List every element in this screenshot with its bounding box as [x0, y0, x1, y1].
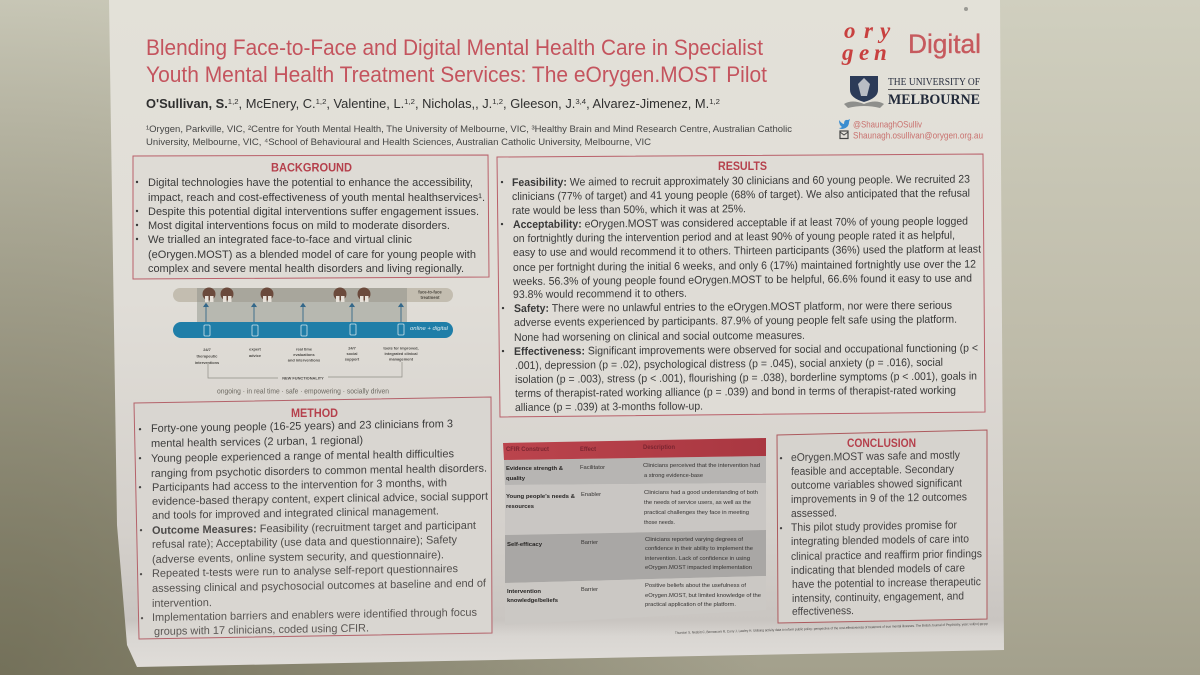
- panel: conclusion: [777, 430, 987, 623]
- authors: , Nicholas,, J.: [415, 97, 492, 111]
- contact details: [839, 119, 983, 142]
- logo: orygen digital: ory: [844, 18, 891, 43]
- method bullets: (adverse events, online system security, and questionnaire).: [152, 549, 444, 566]
- authors: 1,2: [492, 97, 503, 106]
- feature labels: 24/7: [348, 346, 356, 350]
- background bullets: impact, reach and cost-effectiveness of youth mental healthservices¹.: [148, 192, 485, 204]
- feature labels: support: [345, 356, 360, 362]
- feature labels: interventions: [195, 360, 219, 365]
- feature labels: social: [346, 351, 358, 356]
- icon: email: [840, 131, 848, 138]
- conclusion bullets: integrating blended models of care into: [791, 533, 969, 548]
- method bullets: mental health services (2 urban, 1 regional): [151, 435, 363, 450]
- row: evidence strength: Evidence strength &: [506, 466, 563, 472]
- feature labels: tools for improved,: [383, 346, 419, 350]
- row: young people's needs: the needs of service users, as well as the: [644, 500, 751, 506]
- method bullets: ranging from psychotic disorders to common mental health disorders.: [151, 463, 487, 480]
- panel: method: [134, 397, 492, 639]
- authors: 1,2: [316, 97, 326, 106]
- results bullets: Feasibility: We aimed to recruit approximately 30 clinicians and 60 young people. We recruited 23: [512, 174, 970, 189]
- row: evidence strength: Facilitator: [580, 465, 605, 471]
- results bullets: terms of therapist-rated working alliance (p = .039) and bond in terms of therapist-rated working: [515, 385, 956, 400]
- conclusion bullets: outcome variables showed significant: [791, 477, 962, 492]
- poster title: Youth Mental Health Treatment Services: The eOrygen.MOST Pilot: [146, 62, 767, 87]
- background bullets: (eOrygen.MOST) as a blended model of care for young people with: [148, 249, 476, 261]
- icon: twitter: [839, 119, 850, 129]
- method bullets: Young people experienced a range of mental health difficulties: [151, 448, 454, 465]
- results bullets: Effectiveness: Significant improvements were observed for social and occupational functioning (p <: [514, 343, 978, 358]
- conclusion bullets: assessed.: [791, 507, 837, 520]
- background bullets: We trialled an integrated face-to-face and virtual clinic: [148, 234, 412, 246]
- method bullets: evidence-based therapy content, expert clinical advice, social support: [152, 491, 488, 508]
- row: young people's needs: resources: [506, 504, 534, 510]
- row: young people's needs: practical challenges they face in meeting: [644, 510, 749, 516]
- row: evidence strength: [506, 463, 760, 482]
- results bullets: adverse events experienced by participants. 87.9% of young people felt safe using the platform.: [514, 314, 957, 329]
- label: face-to-face treatment: [418, 290, 442, 300]
- background bullets: Digital technologies have the potential to enhance the accessibility,: [148, 177, 473, 189]
- icon: phones: [204, 324, 404, 336]
- results bullets: on fortnightly during the intervention period and at least 90% of young people rated it as helpful,: [513, 230, 955, 245]
- results bullets: easy to use and would recommend it to others. Thirteen participants (36%) used the platform at least: [513, 243, 981, 259]
- results bullets: 93.8% would recommend it to others.: [513, 288, 687, 301]
- feature labels: advice: [249, 353, 262, 358]
- authors: 1,2: [709, 97, 720, 106]
- method bullets: Participants had access to the intervention for 3 months, with: [152, 477, 447, 494]
- conclusion bullets: indicating that blended models of care: [791, 562, 965, 577]
- conclusion bullets: clinical practice and reaffirm prior findings: [791, 548, 982, 563]
- arrows from digital to face-to-face: [204, 304, 404, 322]
- row: intervention knowledge: Barrier: [581, 587, 598, 593]
- background bullets: Most digital interventions focus on mild to moderate disorders.: [148, 220, 450, 232]
- conclusion bullets: intensity, continuity, engagement, and: [792, 590, 964, 605]
- poster pin mark: [964, 7, 968, 11]
- panel: results: [497, 154, 985, 417]
- authors: , McEnery, C.: [239, 97, 316, 111]
- online and digital bar: [173, 322, 453, 338]
- row: evidence strength: quality: [506, 476, 526, 482]
- feature labels: therapeutic: [197, 354, 218, 358]
- results bullets: None had worsening on clinical and social outcome measures.: [514, 330, 805, 344]
- poster title: [146, 35, 767, 87]
- method bullets: intervention.: [152, 597, 212, 610]
- feature labels: integrated clinical: [384, 351, 418, 356]
- conclusion bullets: eOrygen.MOST was safe and mostly: [791, 449, 960, 464]
- row: self-efficacy: [507, 537, 753, 571]
- label: online + digital: online + digital: [410, 326, 449, 332]
- results bullets: Acceptability: eOrygen.MOST was considered acceptable if at least 70% of young people logged: [513, 216, 968, 231]
- table header: Description: [643, 445, 675, 451]
- face-to-face bar: [173, 288, 453, 323]
- method bullets: Repeated t-tests were run to analyse self-report questionnaires: [152, 563, 458, 580]
- logo: university of melbourne: MELBOURNE: [888, 92, 980, 108]
- feature labels: [195, 346, 419, 365]
- heading: results: RESULTS: [718, 159, 767, 173]
- results bullets: Safety: There were no unlawful entries to the eOrygen.MOST platform, nor were there serious: [514, 300, 952, 315]
- table header: CFIR Construct: [506, 447, 549, 453]
- results bullets: [501, 173, 981, 414]
- conclusion bullets: have the potential to increase therapeutic: [792, 576, 981, 591]
- method bullets: and tools for improved and integrated clinical management.: [152, 505, 439, 522]
- results bullets: .001), depression (p = .02), psychological distress (p = .045), social anxiety (p = .016), social: [515, 357, 943, 372]
- results bullets: weeks. 56.3% of young people found eOrygen.MOST to be helpful, 66.6% found it easy to use and: [512, 273, 972, 288]
- feature labels: and interventions: [288, 358, 320, 362]
- heading: background: BACKGROUND: [271, 160, 352, 174]
- authors: 3,4: [575, 97, 586, 106]
- row: evidence strength: Clinicians perceived that the intervention had: [643, 463, 760, 469]
- results bullets: rate would be less than 50%, which it was at 25%.: [512, 203, 746, 217]
- row: intervention knowledge: eOrygen.MOST, but limited knowledge of the: [645, 593, 761, 599]
- table row shading: [504, 456, 766, 625]
- row: self-efficacy: Barrier: [581, 540, 598, 546]
- method bullets: Implementation barriers and enablers were identified through focus: [152, 607, 477, 624]
- row: intervention knowledge: knowledge/beliefs: [507, 598, 558, 604]
- authors: , Gleeson, J.: [503, 97, 575, 111]
- row: intervention knowledge: Positive beliefs about the usefulness of: [645, 583, 746, 589]
- conclusion bullets: feasible and acceptable. Secondary: [791, 464, 954, 478]
- care qualities: ongoing · in real time · safe · empowering · socially driven: [217, 388, 389, 396]
- row: self-efficacy: confidence in their ability to implement the: [645, 546, 753, 552]
- row: intervention knowledge: practical application of the platform.: [645, 602, 736, 608]
- table: CFIR constructs: [503, 438, 766, 625]
- logo: orygen digital: gen: [841, 40, 887, 65]
- footnote reference: Thurston S, Nesbitt C, Bernasconi R, Curry J, Lawley H. Utilising activity data to inform public policy: perspective of the cost-effectiveness of treatment of true mental illnesses. The British Journal of Psychiatry, year; vol(no):pp-pp: [675, 622, 988, 635]
- method bullets: refusal rate); Acceptability (use data and questionnaire); Safety: [152, 534, 457, 551]
- row: young people's needs: [506, 490, 758, 526]
- feature labels: evaluations: [293, 352, 315, 357]
- label: face-to-face treatment: face-to-face: [418, 290, 442, 294]
- feature labels: management: [389, 356, 414, 362]
- feature labels: 24/7: [203, 347, 211, 352]
- background bullets: complex and severe mental health disorders and living regionally.: [148, 263, 464, 275]
- crest: [844, 76, 884, 108]
- poster title: Blending Face-to-Face and Digital Mental Health Care in Specialist: [146, 35, 763, 60]
- row: self-efficacy: eOrygen.MOST impacted implementation: [645, 565, 752, 571]
- logo: university of melbourne: [844, 76, 980, 108]
- logo: university of melbourne: THE UNIVERSITY OF: [888, 77, 980, 88]
- row: intervention knowledge: [507, 583, 761, 608]
- results bullets: once per fortnight during the initial 6 weeks, and only 6 (17%) maintained fortnightly use over the 12: [513, 259, 976, 274]
- results bullets: alliance (p = .039) at 3-months follow-up.: [515, 401, 703, 414]
- background bullets: [136, 177, 485, 275]
- heading: conclusion: CONCLUSION: [847, 436, 916, 450]
- bracket: new functionality: NEW FUNCTIONALITY: [282, 376, 324, 380]
- logo: orygen digital: Digital: [908, 29, 981, 59]
- table header: [503, 438, 766, 460]
- table header: Effect: [580, 447, 596, 453]
- row: young people's needs: Clinicians had a good understanding of both: [644, 490, 758, 496]
- row: self-efficacy: Self-efficacy: [507, 542, 543, 548]
- method bullets: Outcome Measures: Feasibility (recruitment target and participant: [152, 520, 476, 537]
- poster sheet: [109, 0, 1004, 667]
- row: young people's needs: Young people's needs &: [506, 494, 575, 500]
- row: young people's needs: those needs.: [644, 520, 675, 526]
- authors: , Valentine, L.: [326, 97, 404, 111]
- label: face-to-face treatment: treatment: [420, 295, 440, 300]
- affiliations: [146, 124, 792, 148]
- icon: clinician and young person pairs: [202, 288, 370, 302]
- results bullets: clinicians (77% of target) and 41 young people (68% of target). We also anticipated that the refusal: [512, 188, 970, 203]
- heading: method: METHOD: [291, 406, 338, 420]
- authors: O'Sullivan, S.: [146, 97, 228, 111]
- row: self-efficacy: Clinicians reported varying degrees of: [645, 537, 743, 543]
- feature labels: expert: [249, 346, 262, 352]
- method bullets: assessing clinical and psychosocial outcomes at baseline and end of: [152, 578, 487, 595]
- conclusion bullets: [780, 449, 982, 618]
- panel: background: [133, 155, 489, 279]
- conclusion bullets: effectiveness.: [792, 605, 854, 618]
- method bullets: Forty-one young people (16-25 years) and 23 clinicians from 3: [151, 418, 453, 435]
- row: evidence strength: a strong evidence-base: [644, 473, 703, 479]
- contact details: Shaunagh.osullivan@orygen.org.au: [853, 130, 983, 142]
- background bullets: Despite this potential digital interventions suffer engagement issues.: [148, 206, 479, 218]
- row: self-efficacy: intervention. Lack of confidence in using: [645, 556, 750, 562]
- bracket: new functionality: [208, 362, 402, 380]
- feature labels: real time: [296, 346, 313, 352]
- row: young people's needs: Enabler: [581, 492, 601, 498]
- results bullets: isolation (p = .003), stress (p < .001), flourishing (p = .038), borderline symptoms (p < .001), goals in: [515, 371, 977, 386]
- conclusion bullets: improvements in 9 of the 12 outcomes: [791, 491, 967, 506]
- authors: 1,2: [228, 97, 239, 106]
- contact details: @ShaunaghOSulliv: [853, 120, 922, 130]
- method bullets: [139, 418, 488, 638]
- authors: , Alvarez-Jimenez, M.: [586, 97, 709, 111]
- authors: 1,2: [404, 97, 415, 106]
- row: intervention knowledge: Intervention: [507, 589, 541, 595]
- logo: orygen digital: [841, 18, 981, 65]
- diagram: blended care model: [173, 288, 453, 396]
- method bullets: groups with 17 clinicians, coded using CFIR.: [154, 623, 369, 638]
- affiliations: ¹Orygen, Parkville, VIC, ²Centre for Youth Mental Health, The University of Melbourne, VIC, ³Healthy Brain and Mind Research Centre, Australian Catholic: [146, 124, 792, 135]
- conclusion bullets: This pilot study provides promise for: [791, 520, 957, 534]
- affiliations: University, Melbourne, VIC, ⁴School of Behavioural and Health Sciences, Australian Catholic University, Melbourne, VIC: [146, 137, 651, 148]
